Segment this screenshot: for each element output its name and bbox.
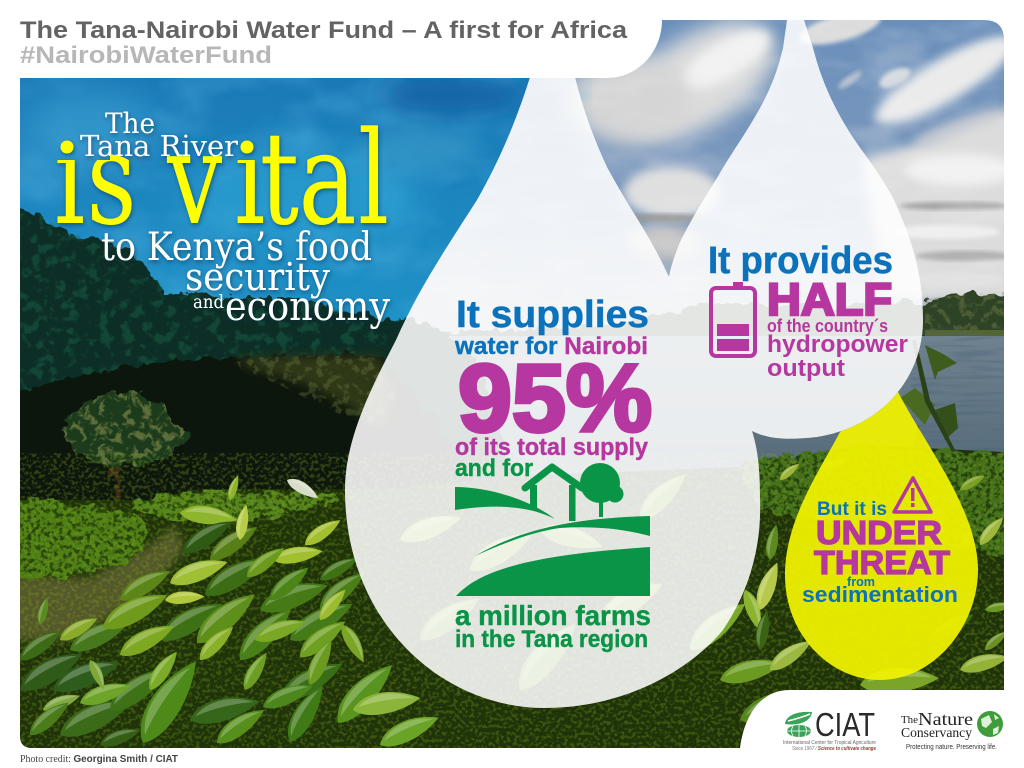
- header hashtag: #NairobiWaterFund: [20, 42, 272, 69]
- icon: CIAT leaf and globe: [785, 712, 812, 737]
- logo: The Nature Conservancy: Conservancy: [901, 726, 972, 741]
- sky left, saturated blue: [20, 78, 531, 340]
- text: of the country's: of the country´s: [767, 316, 888, 336]
- distant hills: [444, 290, 1004, 336]
- panel: Nairobi water supply: [454, 294, 652, 653]
- white drops: [345, 20, 923, 708]
- text: hydropower: hydropower: [767, 331, 908, 358]
- panel: sedimentation threat: [802, 478, 958, 607]
- sky right: [406, 20, 1004, 336]
- headline: The Tana River is vital to Kenya's food security and economy: [54, 104, 390, 330]
- logo: CIAT: International Center for Tropical Agriculture: [783, 740, 876, 746]
- foreground tree: [60, 388, 195, 500]
- headline: The Tana River is vital to Kenya's food security and economy: is vital: [54, 104, 389, 253]
- text: of its total supply: of its total supply: [455, 434, 649, 461]
- headline: The Tana River is vital to Kenya's food security and economy: The: [105, 107, 155, 140]
- icon: green globe: [977, 711, 1003, 737]
- text: output: output: [767, 355, 845, 382]
- tea leaves: [14, 455, 1014, 753]
- logo: The Nature Conservancy: The: [901, 714, 918, 726]
- header title: The Tana-Nairobi Water Fund – A first for Africa: [20, 17, 628, 44]
- text: and for: and for: [455, 455, 533, 482]
- text: a million farms: a million farms: [455, 600, 651, 631]
- headline: The Tana River is vital to Kenya's food security and economy: economy: [225, 284, 390, 330]
- stat: THREAT: THREAT: [814, 544, 950, 581]
- icon: battery: [711, 282, 755, 356]
- plant against the lake: [900, 340, 958, 452]
- text: sedimentation: sedimentation: [802, 582, 958, 607]
- logo: The Nature Conservancy: Protecting nature. Preserving life.: [906, 742, 997, 751]
- headline: The Tana River is vital to Kenya's food security and economy: Tana River: [80, 129, 238, 163]
- stat: UNDER: UNDER: [816, 514, 942, 551]
- text: water for Nairobi: water for Nairobi: [454, 333, 648, 360]
- photo credit: Photo credit: Georgina Smith / CIAT: [20, 754, 178, 765]
- heading: It supplies: It supplies: [456, 294, 649, 336]
- heading: It provides: It provides: [708, 240, 893, 282]
- panel: hydropower: [708, 240, 908, 382]
- icon: farm with house and tree: [455, 463, 650, 596]
- headline: The Tana River is vital to Kenya's food security and economy: security: [185, 255, 330, 299]
- stat: 95%: 95%: [458, 345, 652, 452]
- headline: The Tana River is vital to Kenya's food security and economy: to Kenya’s food: [101, 225, 372, 270]
- yellow drop: [785, 390, 978, 680]
- text: in the Tana region: in the Tana region: [455, 626, 648, 653]
- text: But it is: But it is: [817, 499, 887, 520]
- logo: CIAT: Since 1967 / Science to cultivate change: [792, 746, 876, 752]
- clouds right: [575, 20, 1004, 305]
- logo: The Nature Conservancy: [901, 709, 1003, 751]
- lake: [448, 336, 1004, 477]
- logo: The Nature Conservancy: Nature: [918, 709, 973, 729]
- stat: HALF: HALF: [767, 274, 892, 325]
- icon: warning triangle: [894, 478, 931, 512]
- logo: CIAT: [783, 706, 876, 752]
- text: from: from: [847, 574, 875, 589]
- logo: CIAT: CIAT: [815, 706, 875, 743]
- headline: The Tana River is vital to Kenya's food security and economy: and: [193, 291, 224, 313]
- forest: [20, 208, 512, 480]
- tea field base: [20, 445, 1004, 748]
